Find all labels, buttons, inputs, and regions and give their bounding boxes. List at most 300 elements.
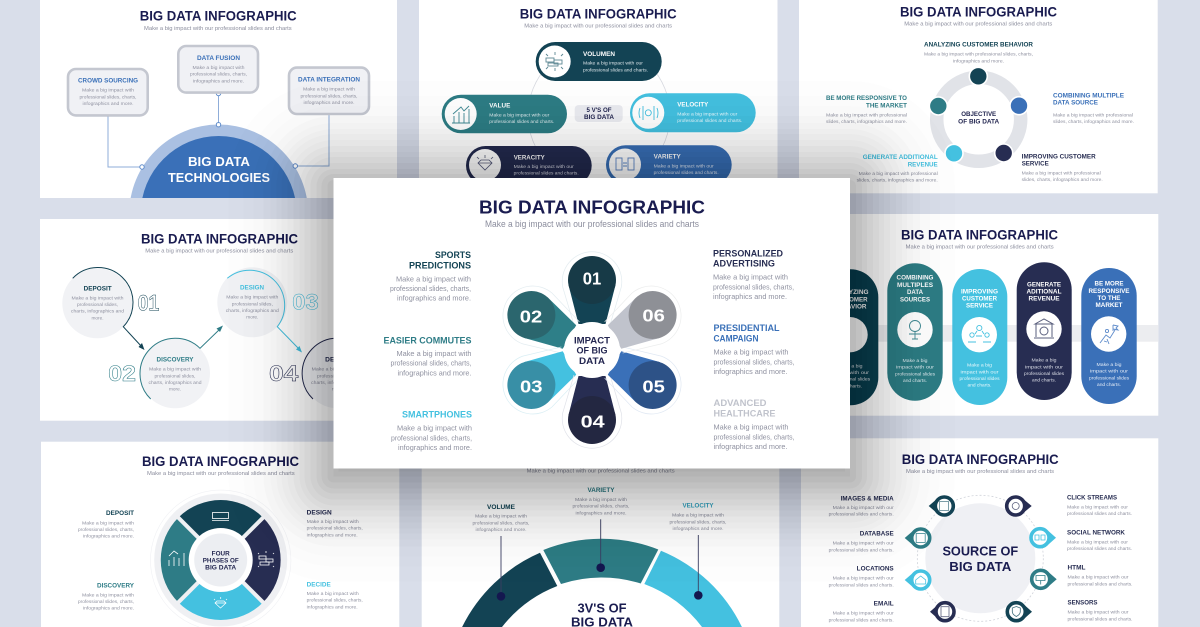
text: sports predictions: infographics and more. — [397, 294, 471, 303]
pillar: generate aditional revenue: REVENUE — [1028, 296, 1060, 303]
text: sports predictions: professional slides, charts, — [390, 284, 471, 293]
text: easier commutes: Make a big impact with — [396, 349, 472, 358]
step 02: discovery: charts, infographics and — [148, 380, 202, 385]
pillar: combining multiples data sources: SOURCES — [900, 296, 930, 303]
text: discovery: DISCOVERY — [97, 582, 135, 589]
icon: signal — [639, 106, 658, 120]
pillar: analyzing customer behavior: professional slides — [830, 377, 871, 382]
text: sensors: professional slides and charts. — [1068, 616, 1132, 621]
step 02: discovery: 02 — [108, 361, 136, 386]
text: images and media: Make a big impact with our — [833, 505, 894, 510]
pillar: be more responsive to the market: BE MORE — [1094, 281, 1124, 288]
text: be more responsive: BE MORE RESPONSIVE TO — [826, 95, 907, 102]
step 04: decide: more. — [332, 387, 344, 392]
title: BIG DATA INFOGRAPHIC — [140, 9, 297, 24]
pillar: generate aditional revenue — [1017, 262, 1072, 400]
text: design: infographics and more. — [307, 532, 358, 537]
pill: value: Make a big impact with our — [489, 112, 550, 117]
pillar: be more responsive to the market: RESPONSIVE — [1088, 288, 1130, 295]
text: images and media — [829, 495, 894, 517]
text: decide — [307, 581, 363, 609]
callout: velocity: Make a big impact with — [672, 513, 724, 518]
title: BIG DATA INFOGRAPHIC — [142, 454, 299, 469]
callout: variety — [572, 487, 630, 572]
pillar: combining multiples data sources: and charts. — [903, 378, 927, 383]
pillar: improving customer service: professional slides — [960, 376, 1000, 381]
box: crowd sourcing: CROWD SOURCING — [78, 78, 138, 85]
text: smartphones: Make a big impact with — [397, 424, 472, 433]
text: personalized advertising: infographics and more. — [713, 292, 787, 301]
pillar: analyzing customer behavior: ANALYZING — [832, 289, 869, 296]
text: advanced healthcare: infographics and more. — [714, 442, 788, 451]
central circle: SOURCE OF — [942, 544, 1018, 559]
pillar: generate aditional revenue: ADITIONAL — [1026, 289, 1062, 296]
icon: chart — [169, 551, 184, 566]
text: presidential campaign: Make a big impact with — [714, 348, 788, 357]
petal 02: 02 — [520, 306, 543, 326]
subtitle: Make a big impact with our professional slides and charts — [527, 469, 675, 475]
text: personalized advertising: PERSONALIZED — [713, 248, 783, 258]
icon: people network — [968, 325, 991, 342]
pillar: combining multiples data sources — [887, 263, 943, 401]
petal 03: 03 — [520, 377, 543, 397]
text: smartphones — [391, 410, 472, 452]
pill: veracity — [466, 146, 592, 185]
text: decide: DECIDE — [307, 581, 331, 588]
text: email: professional slides and charts. — [829, 617, 894, 622]
box: data fusion: infographics and more. — [193, 78, 244, 83]
callout: velocity: professional slides, charts, — [670, 519, 726, 524]
pillar: analyzing customer behavior: impact with our — [831, 370, 870, 375]
subtitle: Make a big impact with our professional slides and charts — [145, 248, 294, 254]
central circle — [917, 495, 1043, 621]
text: improving customer service: Make a big impact with professional — [1022, 170, 1101, 175]
callout: volume — [472, 504, 530, 601]
text: combining multiple: Make a big impact with professional — [1053, 112, 1133, 117]
step 04: decide — [269, 338, 373, 408]
box: crowd sourcing: Make a big impact with — [82, 88, 134, 93]
pillar: combining multiples data sources: impact with our — [896, 365, 935, 370]
pill: variety: professional slides and charts. — [654, 170, 719, 175]
callout: volume: infographics and more. — [476, 527, 526, 532]
text: easier commutes: EASIER COMMUTES — [384, 335, 472, 345]
panel: objective of big data slide — [799, 0, 1158, 193]
text: html — [1068, 564, 1132, 586]
text: deposit: professional slides, charts, — [78, 527, 134, 532]
text: combining multiple: COMBINING MULTIPLE — [1053, 92, 1124, 99]
panel: source of big data slide — [801, 438, 1158, 627]
text: advanced healthcare: ADVANCED — [714, 398, 767, 408]
text: presidential campaign: PRESIDENTIAL — [714, 323, 780, 333]
text: improving customer service: slides, charts, infographics and more. — [1022, 177, 1103, 182]
text: sports predictions: PREDICTIONS — [409, 260, 471, 270]
step 03: design: professional slides, — [232, 301, 273, 306]
text: sensors — [1068, 599, 1132, 621]
text: advanced healthcare: Make a big impact with — [714, 423, 788, 432]
step 03: design: Make a big impact with — [226, 295, 279, 300]
text: presidential campaign: infographics and more. — [714, 367, 788, 376]
pins — [905, 497, 1057, 621]
text: discovery: professional slides, charts, — [78, 599, 134, 604]
step 03: design: 03 — [292, 289, 319, 314]
text: html: professional slides and charts. — [1068, 581, 1132, 586]
pillar: combining multiples data sources: COMBINING — [896, 275, 934, 282]
pillar: generate aditional revenue: Make a big — [1032, 358, 1057, 363]
pillar: generate aditional revenue: GENERATE — [1027, 281, 1061, 288]
donut chart: PHASES OF — [203, 557, 239, 564]
pill: variety — [606, 145, 732, 184]
subtitle: Make a big impact with our professional slides and charts — [144, 26, 292, 32]
pill: velocity — [630, 93, 756, 132]
petal 05: 05 — [642, 376, 665, 396]
step 03: design — [217, 267, 319, 352]
semicircle: big data technologies: TECHNOLOGIES — [168, 170, 270, 185]
pill: variety: VARIETY — [654, 154, 682, 161]
text: generate additional revenue: slides, charts, infographics and more. — [857, 178, 938, 183]
panel: 5 v's of big data slide — [419, 0, 778, 186]
text: advanced healthcare: professional slides, charts, — [714, 432, 794, 441]
panel: big data technologies slide — [40, 0, 397, 198]
text: be more responsive: Make a big impact with professional — [826, 112, 907, 117]
text: social network: professional slides and charts. — [1067, 546, 1132, 551]
step 01: deposit — [62, 268, 159, 350]
petal 03 — [492, 337, 585, 425]
text: advanced healthcare: HEALTHCARE — [714, 408, 776, 418]
callout: variety: Make a big impact with — [575, 497, 627, 502]
pillar: generate aditional revenue: professional slides — [1024, 371, 1065, 376]
text: click streams — [1067, 494, 1132, 516]
text: smartphones: SMARTPHONES — [402, 410, 472, 420]
pillar: generate aditional revenue: and charts. — [1032, 378, 1056, 383]
box: data integration: infographics and more. — [304, 100, 354, 105]
icon: exchange — [616, 158, 634, 170]
donut chart: FOUR — [212, 550, 230, 557]
pillar: combining multiples data sources: professional slides — [895, 371, 936, 376]
step 01: deposit: Make a big impact with — [72, 295, 124, 300]
text: sports predictions: SPORTS — [435, 250, 471, 260]
pill: velocity: VELOCITY — [677, 102, 709, 109]
text: deposit: infographics and more. — [83, 534, 134, 539]
pillar: improving customer service — [952, 269, 1007, 405]
box: data integration: professional slides, charts, — [300, 93, 358, 98]
step 01: deposit: professional slides, — [77, 302, 118, 307]
text: social network: SOCIAL NETWORK — [1067, 529, 1125, 536]
text: design: Make a big impact with — [307, 519, 359, 524]
subtitle: Make a big impact with our professional slides and charts — [485, 219, 699, 229]
icon: growth chart — [452, 106, 470, 123]
step 04: decide: DECIDE — [325, 356, 350, 363]
ring diagram: OBJECTIVE — [961, 111, 996, 118]
text: email — [829, 601, 894, 622]
pillar: be more responsive to the market: TO THE — [1098, 295, 1120, 302]
text: smartphones: infographics and more. — [398, 443, 472, 452]
title: BIG DATA INFOGRAPHIC — [479, 197, 705, 218]
pill: veracity: VERACITY — [514, 154, 546, 161]
arc chart: 3V'S OF — [578, 600, 627, 615]
semicircle: big data technologies — [130, 124, 307, 198]
label: 5 v's of big data — [575, 105, 623, 122]
text: locations: Make a big impact with our — [833, 576, 894, 581]
box: data integration: Make a big impact with — [303, 87, 355, 92]
center label: impact of big data: DATA — [579, 356, 606, 366]
text: discovery — [78, 582, 135, 611]
step 01: deposit: 01 — [138, 291, 159, 316]
pill: value: professional slides and charts. — [489, 119, 554, 124]
text: database: DATABASE — [860, 531, 894, 538]
donut chart — [150, 490, 291, 627]
text: database — [829, 531, 894, 552]
step 02: discovery: DISCOVERY — [156, 356, 194, 363]
text: combining multiple: slides, charts, infographics and more. — [1053, 119, 1134, 124]
text: be more responsive: slides, charts, infographics and more. — [826, 119, 907, 124]
text: deposit — [78, 510, 134, 539]
text: easier commutes: professional slides, charts, — [390, 359, 472, 368]
pill: veracity: professional slides and charts. — [514, 171, 579, 176]
text: deposit: Make a big impact with — [82, 520, 134, 525]
box: crowd sourcing: professional slides, charts, — [80, 94, 136, 99]
step 04: decide: Make a big impact with — [312, 367, 364, 372]
center label: impact of big data — [564, 322, 620, 378]
text: personalized advertising: Make a big impact with — [713, 273, 788, 282]
flower diagram — [492, 252, 692, 448]
petal 04 — [562, 375, 622, 448]
ring diagram: OF BIG DATA — [958, 118, 1000, 125]
label: 5 v's of big data: BIG DATA — [584, 114, 615, 121]
icon: diamond — [214, 597, 227, 608]
pill: volumen: professional slides and charts. — [583, 67, 648, 72]
callout: volume: VOLUME — [487, 504, 515, 511]
text: decide: professional slides, charts, — [307, 598, 363, 603]
subtitle: Make a big impact with our professional slides and charts — [147, 471, 295, 477]
text: personalized advertising: professional slides, charts, — [713, 282, 794, 291]
text: email: Make a big impact with our — [833, 611, 894, 616]
text: locations: professional slides and charts. — [829, 582, 894, 587]
pillar: be more responsive to the market: professional slides — [1089, 375, 1130, 380]
panel: process circles slide — [40, 219, 397, 421]
text: combining multiple — [1053, 92, 1134, 124]
step 04: decide: 04 — [269, 361, 299, 386]
title: BIG DATA INFOGRAPHIC — [902, 452, 1059, 467]
pillar: analyzing customer behavior — [823, 269, 878, 405]
text: locations — [829, 566, 894, 587]
text: locations: LOCATIONS — [857, 566, 894, 573]
text: decide: infographics and more. — [307, 604, 358, 609]
text: design: DESIGN — [307, 509, 332, 516]
text: improving customer service: SERVICE — [1022, 161, 1049, 168]
panel: 3v's slide — [422, 460, 779, 627]
step 03: design: more. — [246, 315, 258, 320]
text: presidential campaign — [714, 323, 794, 376]
panel: pillars slide — [800, 214, 1158, 416]
central circle: BIG DATA — [949, 559, 1012, 574]
text: click streams: Make a big impact with our — [1067, 504, 1128, 509]
pill: volumen — [536, 42, 662, 81]
step 04: decide: charts, infographics and — [311, 380, 365, 385]
subtitle: Make a big impact with our professional slides and charts — [904, 22, 1053, 28]
center label: impact of big data: OF BIG — [576, 346, 608, 356]
arc chart — [462, 539, 742, 627]
step 03: design: DESIGN — [240, 285, 264, 292]
text: html: Make a big impact with our — [1068, 575, 1129, 580]
petal 01 — [562, 252, 622, 325]
pill: veracity: Make a big impact with our — [514, 164, 574, 169]
petal 01: 01 — [583, 269, 602, 289]
text: discovery: Make a big impact with — [82, 592, 134, 597]
step 04: decide: professional slides, — [317, 373, 358, 378]
icon: clock mechanism — [909, 320, 921, 339]
text: social network — [1067, 529, 1132, 551]
subtitle: Make a big impact with our professional slides and charts — [906, 469, 1054, 475]
pill: velocity: professional slides and charts. — [677, 118, 742, 123]
petal 02 — [492, 275, 585, 363]
petal 06 — [599, 275, 692, 363]
ring diagram — [929, 67, 1028, 162]
text: analyzing customer behavior: ANALYZING CUSTOMER BEHAVIOR — [924, 42, 1033, 49]
subtitle: Make a big impact with our professional slides and charts — [906, 244, 1054, 250]
text: advanced healthcare — [714, 398, 794, 451]
pillar: improving customer service: and charts. — [968, 383, 992, 388]
title: BIG DATA INFOGRAPHIC — [901, 227, 1058, 242]
text: sensors: Make a big impact with our — [1068, 610, 1129, 615]
icon: bank — [1034, 319, 1054, 338]
step 01: deposit: charts, infographics and — [71, 309, 124, 314]
text: decide: Make a big impact with — [307, 591, 359, 596]
box: data integration — [289, 68, 369, 114]
text: be more responsive: THE MARKET — [866, 102, 907, 109]
icon: coins — [546, 52, 563, 71]
step 02: discovery: Make a big impact with — [149, 367, 201, 372]
pill: variety: Make a big impact with our — [654, 163, 714, 168]
subtitle: Make a big impact with our professional slides and charts — [524, 24, 672, 30]
pin icons — [916, 502, 1045, 617]
text: analyzing customer behavior — [924, 42, 1033, 64]
pillar: be more responsive to the market: Make a big — [1096, 362, 1122, 367]
text: click streams: professional slides and charts. — [1067, 511, 1132, 516]
box: crowd sourcing: infographics and more. — [82, 101, 134, 106]
text: sensors: SENSORS — [1068, 599, 1098, 606]
text: be more responsive — [826, 95, 907, 124]
text: smartphones: professional slides, charts, — [391, 433, 472, 442]
pillar: improving customer service: IMPROVING — [961, 288, 998, 295]
box: data integration: DATA INTEGRATION — [298, 77, 360, 84]
text: generate additional revenue: Make a big impact with professional — [859, 171, 938, 176]
pillar: combining multiples data sources: MULTIPLES — [897, 282, 933, 289]
text: images and media: IMAGES & MEDIA — [841, 495, 894, 502]
callout: variety: professional slides, charts, — [572, 504, 630, 509]
text: generate additional revenue — [857, 154, 938, 183]
text: personalized advertising — [713, 248, 794, 301]
panel: main featured slide — [334, 178, 850, 468]
callout: variety: infographics and more. — [576, 510, 626, 515]
petal 05 — [599, 337, 692, 425]
text: deposit: DEPOSIT — [106, 510, 134, 517]
center label: impact of big data: IMPACT — [574, 335, 611, 345]
text: improving customer service — [1022, 153, 1103, 182]
callout: volume: professional slides, charts, — [472, 520, 530, 525]
pillar: combining multiples data sources: DATA — [907, 289, 923, 296]
icon: diamond — [477, 155, 493, 170]
pillar: analyzing customer behavior: CUSTOMER — [832, 296, 868, 303]
text: design — [307, 509, 363, 537]
icon: keyboard — [212, 512, 229, 520]
petal 06: 06 — [642, 306, 665, 326]
box: crowd sourcing — [68, 69, 148, 115]
pill: volumen: Make a big impact with our — [583, 61, 643, 66]
text: images and media: professional slides and charts. — [829, 512, 894, 517]
text: social network: Make a big impact with our — [1067, 539, 1128, 544]
text: analyzing customer behavior: Make a big impact with professional slides, charts, — [924, 52, 1033, 57]
text: sports predictions: Make a big impact with — [396, 274, 471, 283]
text: presidential campaign: CAMPAIGN — [714, 334, 758, 344]
step 02: discovery: professional slides, — [154, 373, 196, 378]
connectors — [106, 91, 331, 169]
petal 04: 04 — [581, 411, 605, 431]
text: analyzing customer behavior: infographics and more. — [953, 58, 1004, 64]
callout: velocity: VELOCITY — [682, 503, 714, 510]
callout: velocity — [670, 503, 726, 600]
step 01: deposit: DEPOSIT — [84, 285, 112, 292]
pill: value: VALUE — [489, 103, 510, 110]
text: easier commutes — [384, 335, 472, 378]
pill: value — [442, 95, 567, 133]
pillar: improving customer service: impact with our — [960, 369, 999, 374]
pillar: analyzing customer behavior: Make a big — [838, 363, 863, 368]
text: email: EMAIL — [874, 601, 894, 608]
pillar: analyzing customer behavior: and charts. — [838, 383, 862, 388]
icon: coins — [258, 551, 274, 567]
pillar: be more responsive to the market: and charts. — [1097, 382, 1121, 387]
title: BIG DATA INFOGRAPHIC — [141, 231, 298, 246]
box: data fusion: Make a big impact with — [192, 65, 245, 70]
step 02: discovery — [108, 326, 223, 408]
text: discovery: infographics and more. — [83, 606, 134, 611]
donut chart: BIG DATA — [205, 565, 237, 572]
text: click streams: CLICK STREAMS — [1067, 494, 1117, 501]
title: BIG DATA INFOGRAPHIC — [520, 7, 677, 22]
label: 5 v's of big data: 5 V'S OF — [586, 107, 612, 114]
text: generate additional revenue: REVENUE — [908, 161, 938, 168]
callout: variety: VARIETY — [588, 487, 615, 494]
step 02: discovery: more. — [169, 387, 181, 392]
pillar: improving customer service: CUSTOMER — [962, 296, 997, 303]
icon: climber with flag — [1100, 325, 1118, 344]
text: database: Make a big impact with our — [833, 541, 894, 546]
pillar: improving customer service: SERVICE — [966, 303, 993, 310]
text: improving customer service: IMPROVING CUSTOMER — [1022, 153, 1096, 160]
pillar: be more responsive to the market: impact with our — [1090, 369, 1129, 374]
box: data fusion — [178, 46, 258, 93]
text: personalized advertising: ADVERTISING — [713, 259, 775, 269]
text: easier commutes: infographics and more. — [398, 368, 472, 378]
pillar: analyzing customer behavior: BEHAVIOR — [834, 303, 867, 310]
text: combining multiple: DATA SOURCE — [1053, 100, 1098, 107]
semicircle: big data technologies: BIG DATA — [188, 154, 251, 169]
step 01: deposit: more. — [92, 315, 104, 320]
pillar: be more responsive to the market: MARKET — [1096, 302, 1123, 309]
text: design: professional slides, charts, — [307, 526, 363, 531]
panel: four phases slide — [41, 442, 399, 627]
text: database: professional slides and charts. — [829, 547, 894, 552]
step 03: design: charts, infographics and — [226, 308, 279, 313]
pill: velocity: Make a big impact with our — [677, 111, 738, 116]
callout: volume: Make a big impact with — [475, 514, 527, 519]
text: html: HTML — [1068, 564, 1086, 571]
box: data fusion: professional slides, charts, — [190, 72, 247, 77]
pillar: combining multiples data sources: Make a big — [902, 358, 928, 363]
box: data fusion: DATA FUSION — [197, 55, 240, 62]
text: sports predictions — [390, 250, 471, 303]
pillar: be more responsive to the market — [1081, 268, 1137, 404]
